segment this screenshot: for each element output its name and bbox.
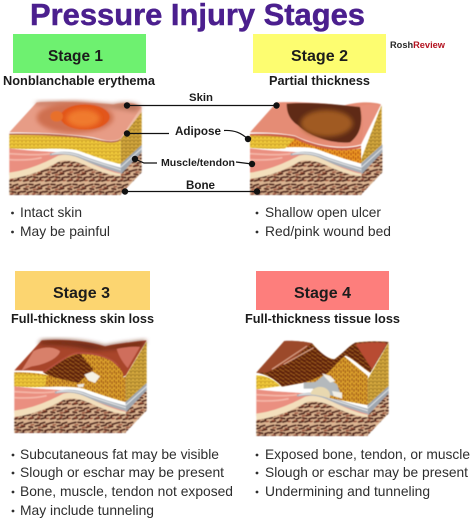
label: bone: Bone bbox=[186, 180, 215, 192]
label: adipose bbox=[124, 126, 251, 142]
stage 1 bullets bbox=[11, 205, 110, 239]
stage 2 bullets: Red/pink wound bed bbox=[265, 224, 391, 239]
stage 4 skin cross-section bbox=[256, 341, 389, 436]
label: bone bbox=[122, 180, 260, 195]
stage 4 bullets: Slough or eschar may be present bbox=[265, 465, 468, 480]
label: muscle/tendon bbox=[132, 156, 255, 169]
stage 4 bullets: Exposed bone, tendon, or muscle bbox=[265, 447, 470, 462]
panel: stage 3 bbox=[11, 271, 233, 518]
stage 2 bullets: Shallow open ulcer bbox=[265, 205, 381, 220]
stage 3 bullets: May include tunneling bbox=[20, 503, 154, 518]
stage 3 subtitle: Full-thickness skin loss bbox=[11, 312, 154, 326]
panel: stage 2 bbox=[250, 34, 391, 239]
stage 4 heading: Stage 4 bbox=[294, 285, 351, 302]
stage 3 heading: Stage 3 bbox=[53, 285, 110, 302]
stage 3 bullets: Slough or eschar may be present bbox=[20, 465, 224, 480]
stage 1 bullets: May be painful bbox=[20, 224, 110, 239]
stage 2 heading: Stage 2 bbox=[291, 48, 348, 65]
anatomy labels bbox=[122, 92, 280, 195]
stage 4 bullets: Undermining and tunneling bbox=[265, 484, 430, 499]
stage 3 bullets: Subcutaneous fat may be visible bbox=[20, 447, 219, 462]
stage 3 bullets: Bone, muscle, tendon not exposed bbox=[20, 484, 233, 499]
stage 3 bullets bbox=[12, 447, 233, 518]
stage 3 skin cross-section bbox=[14, 340, 147, 433]
stage 1 bullets: Intact skin bbox=[20, 205, 82, 220]
panel: stage 4 bbox=[245, 271, 470, 499]
stage 4 banner bbox=[256, 271, 389, 310]
panel: stage 1 bbox=[3, 34, 156, 239]
stage 2 skin cross-section bbox=[250, 102, 382, 195]
label: skin: Skin bbox=[189, 92, 213, 104]
label: adipose: Adipose bbox=[175, 126, 221, 138]
stage 4 bullets bbox=[256, 447, 470, 499]
stage 2 banner bbox=[253, 34, 386, 73]
label: muscle/tendon: Muscle/tendon bbox=[161, 157, 235, 169]
stage 2 bullets bbox=[256, 205, 391, 239]
stage 2 subtitle: Partial thickness bbox=[269, 74, 370, 88]
stage 1 skin cross-section bbox=[9, 102, 142, 195]
logo: RoshReview: RoshReview bbox=[390, 40, 446, 51]
stage 4 subtitle: Full-thickness tissue loss bbox=[245, 312, 400, 326]
stage 1 banner bbox=[13, 34, 146, 73]
label: skin bbox=[124, 92, 280, 109]
stage 1 subtitle: Nonblanchable erythema bbox=[3, 74, 156, 88]
stage 3 banner bbox=[15, 271, 150, 310]
stage 1 heading: Stage 1 bbox=[48, 48, 103, 65]
